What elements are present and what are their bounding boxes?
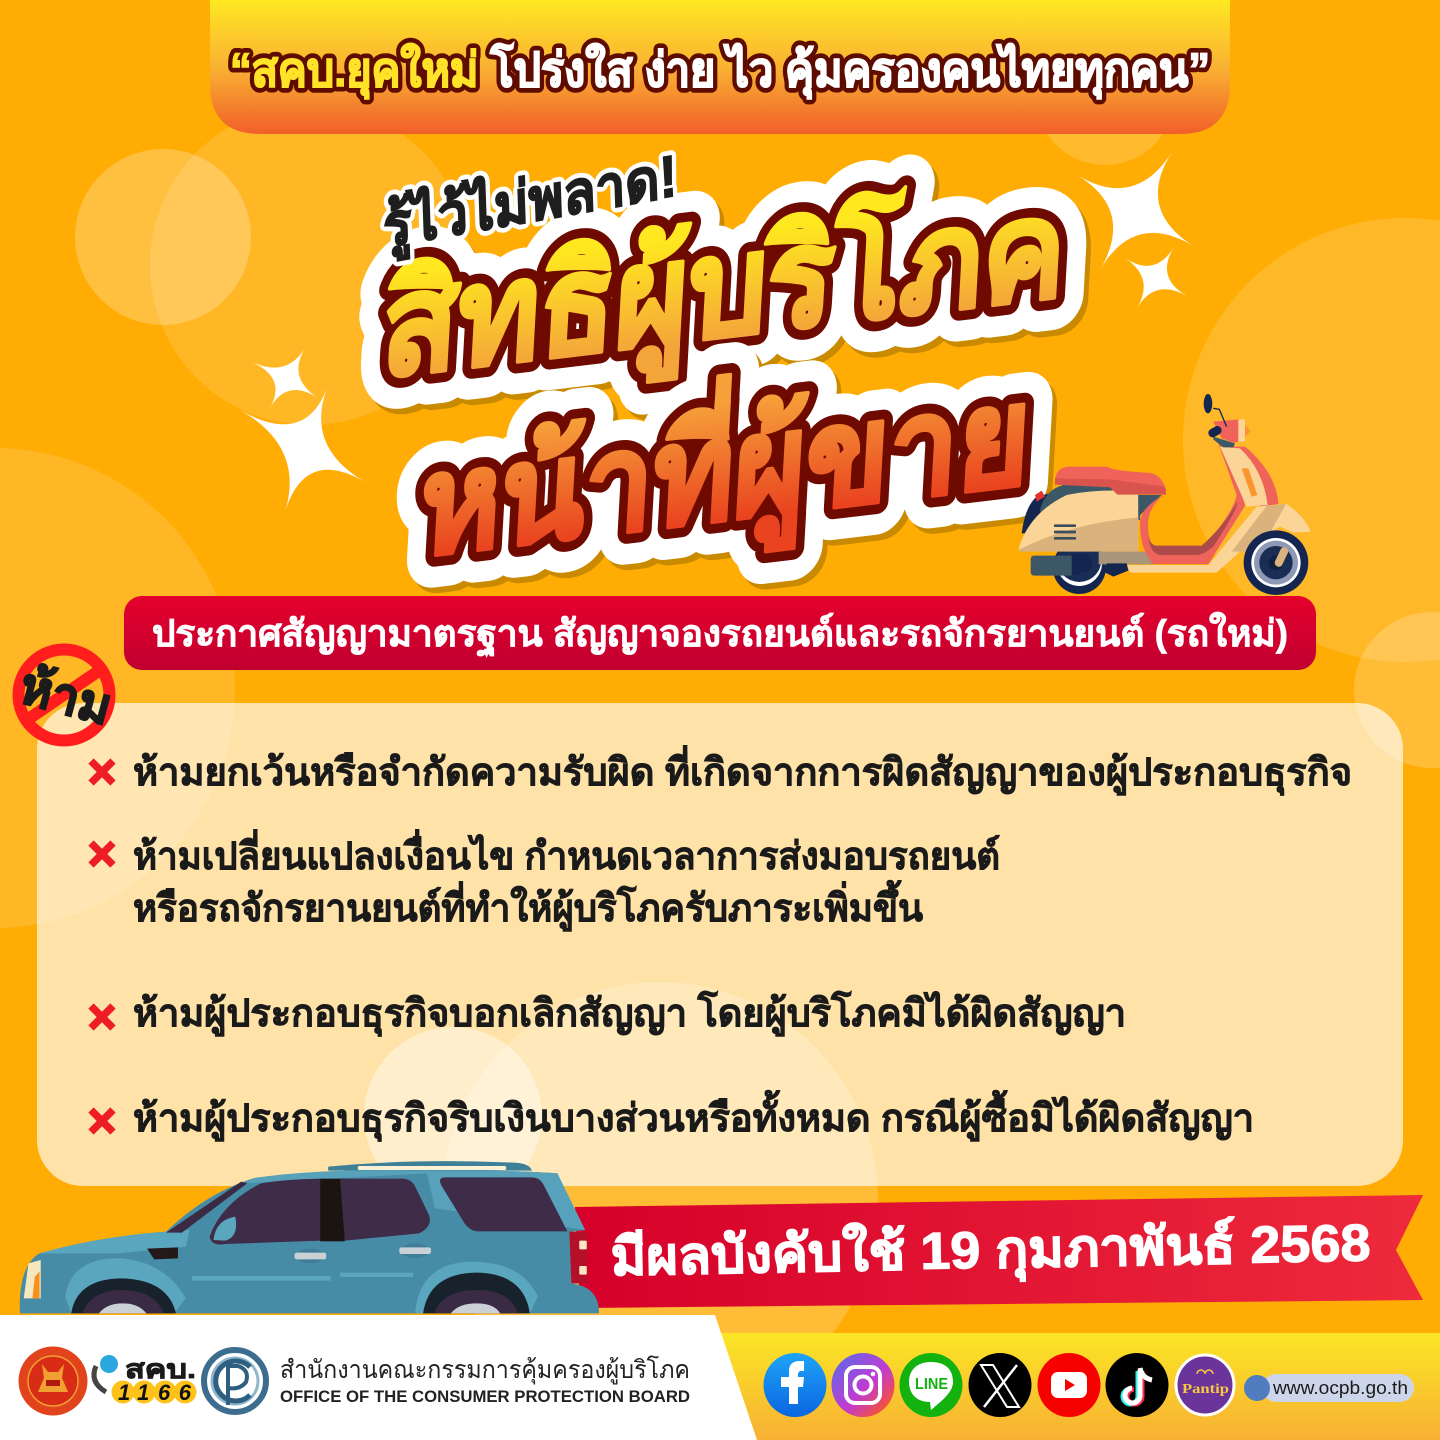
- item 2: [91, 829, 1000, 932]
- website pill: www.ocpb.go.th: [1272, 1378, 1408, 1398]
- heading: seller duties: หน้าที่ผู้ขาย: [416, 337, 1036, 593]
- icon: facebook: [764, 1353, 826, 1417]
- item 1: ห้ามยกเว้นหรือจำกัดความรับผิด ที่เกิดจากการผิดสัญญาของผู้ประกอบธุรกิจ: [133, 745, 1352, 796]
- icon: X: [968, 1353, 1032, 1417]
- ribbon: effective date: [575, 1195, 1423, 1308]
- slogan: “สคบ.ยุคใหม่ โปร่งใส ง่าย ไว คุ้มครองคนไทยทุกคน”: [230, 42, 1210, 99]
- icon: LINE: [900, 1353, 962, 1417]
- panel: prohibitions: [37, 703, 1403, 1186]
- heading: seller duties: หน้าที่ผู้ขาย: [416, 337, 1036, 593]
- heading: consumer rights: สิทธิผู้บริโภค: [378, 168, 1070, 414]
- logo: 1166 hotline: สคบ.: [125, 1354, 196, 1384]
- item 2: หรือรถจักรยานยนต์ที่ทำให้ผู้บริโภครับภาระเพิ่มขึ้น: [133, 880, 923, 932]
- heading: seller duties: หน้าที่ผู้ขาย: [420, 343, 1040, 599]
- item 4: ห้ามผู้ประกอบธุรกิจริบเงินบางส่วนหรือทั้งหมด กรณีผู้ซื้อมิได้ผิดสัญญา: [133, 1090, 1254, 1142]
- icon: instagram: [832, 1353, 894, 1417]
- sparkles: [240, 152, 1195, 512]
- heading: seller duties: หน้าที่ผู้ขาย: [416, 337, 1036, 593]
- icon: LINE: LINE: [915, 1376, 948, 1393]
- heading: know so you don't miss: รู้ไว้ไม่พลาด!: [382, 141, 678, 263]
- logo: 1166 hotline: 1166: [118, 1380, 192, 1405]
- top banner: [210, 0, 1230, 134]
- heading: consumer rights: สิทธิผู้บริโภค: [382, 173, 1075, 420]
- agency name: [280, 1355, 690, 1406]
- subtitle bar: [124, 596, 1316, 670]
- logo: 1166 hotline: [94, 1354, 196, 1405]
- icon: prohibited badge: ห้าม: [14, 658, 118, 735]
- icon: YouTube: [1038, 1353, 1100, 1417]
- icon: TikTok: [1106, 1353, 1168, 1417]
- heading: know so you don't miss: รู้ไว้ไม่พลาด!: [382, 141, 678, 263]
- social icons: [764, 1353, 1414, 1417]
- item 2: ห้ามเปลี่ยนแปลงเงื่อนไข กำหนดเวลาการส่งมอบรถยนต์: [133, 829, 1000, 878]
- website pill: [1244, 1374, 1414, 1402]
- icon: scooter: [1018, 394, 1311, 595]
- heading: consumer rights: สิทธิผู้บริโภค: [378, 168, 1070, 414]
- item 3: ห้ามผู้ประกอบธุรกิจบอกเลิกสัญญา โดยผู้บริโภคมิได้ผิดสัญญา: [133, 990, 1126, 1037]
- icon: royal seal: [18, 1346, 88, 1416]
- agency name: OFFICE OF THE CONSUMER PROTECTION BOARD: [280, 1388, 690, 1406]
- ribbon: effective date: มีผลบังคับใช้ 19 กุมภาพันธ์ 2568: [610, 1212, 1371, 1290]
- icon: car: [20, 1161, 599, 1313]
- slogan: “สคบ.ยุคใหม่ โปร่งใส ง่าย ไว คุ้มครองคนไทยทุกคน”: [230, 42, 1210, 99]
- footer: yellow band: [720, 1333, 1440, 1440]
- logo: OCPB: [204, 1350, 266, 1412]
- icon: Pantip: [1176, 1355, 1234, 1415]
- icon: Pantip: Pantip: [1182, 1382, 1229, 1397]
- footer: white band: [0, 1315, 757, 1440]
- subtitle bar: ประกาศสัญญามาตรฐาน สัญญาจองรถยนต์และรถจักรยานยนต์ (รถใหม่): [152, 611, 1288, 657]
- agency name: สำนักงานคณะกรรมการคุ้มครองผู้บริโภค: [280, 1355, 690, 1385]
- heading: consumer rights: สิทธิผู้บริโภค: [378, 168, 1070, 414]
